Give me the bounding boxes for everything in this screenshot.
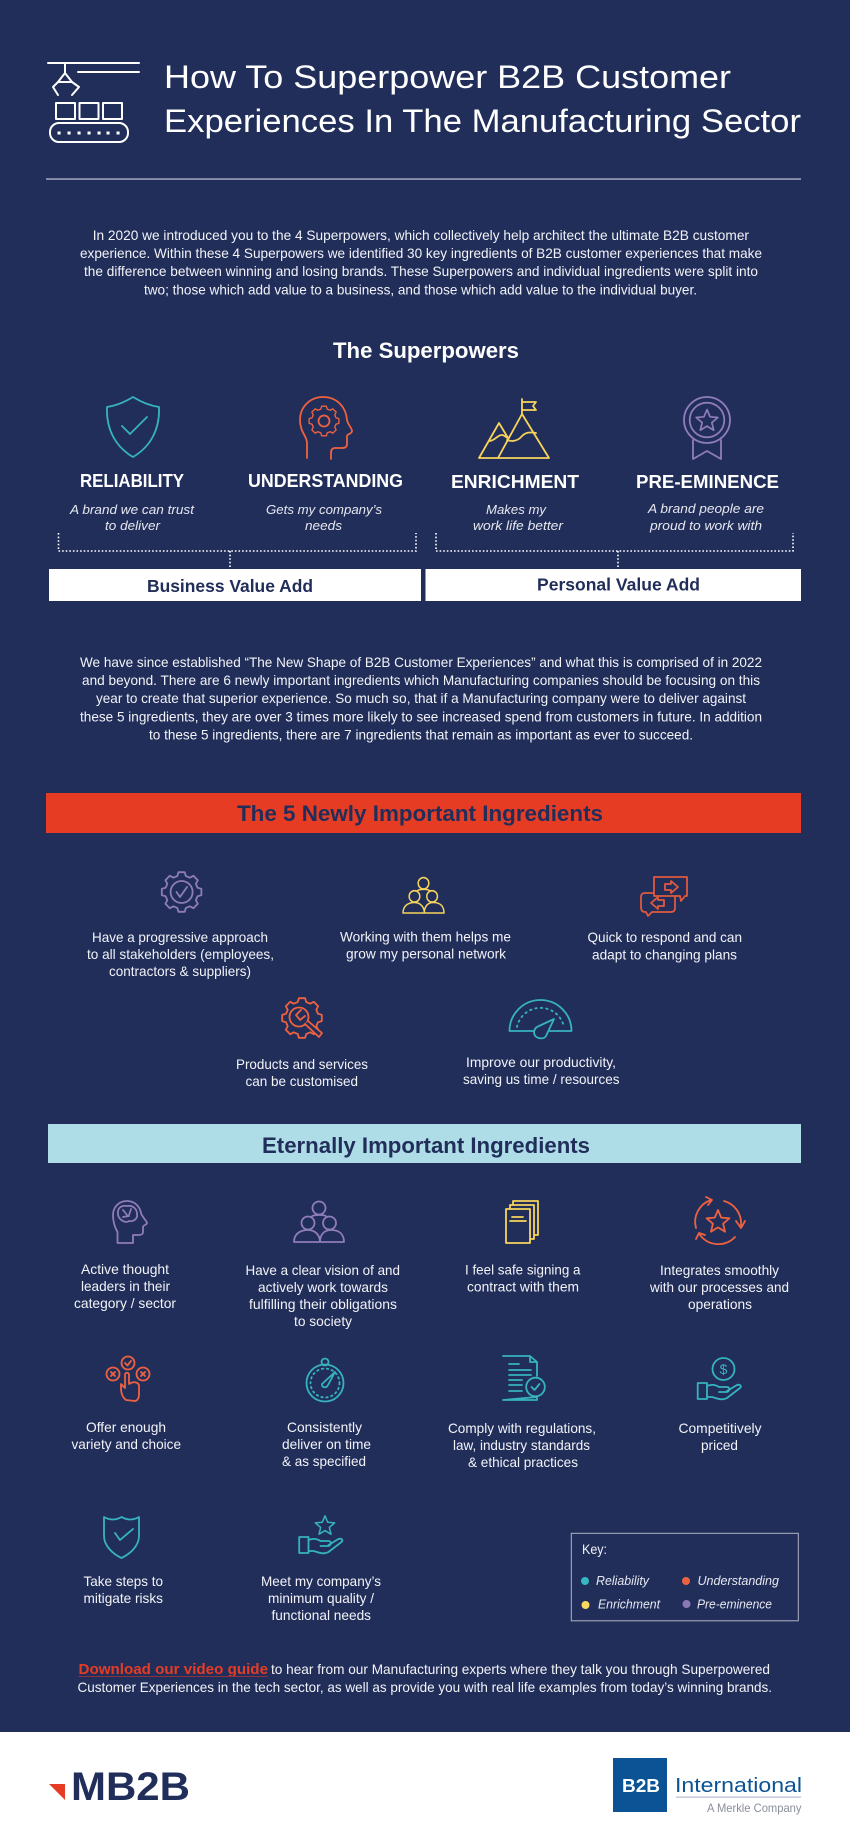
icon: speech bubbles with arrows [641,877,687,916]
superpower: enrichment: Makes my [486,502,548,517]
ingredient: thought leaders: Active thought [81,1261,169,1277]
ingredient: integrates smoothly: operations [688,1296,752,1312]
icon: group of people [403,878,444,913]
ingredient: comply with regulations [448,1356,596,1470]
logo: B2B International: B2B [622,1776,660,1796]
icon: star with cycle arrows [695,1197,745,1244]
ingredient: quick to respond: adapt to changing plans [592,946,737,962]
superpower: pre-eminence: A brand people are [647,501,764,516]
intro paragraph [80,227,762,298]
ingredient: mitigate risks [84,1517,163,1606]
ingredient: variety and choice: Offer enough [86,1419,166,1435]
ingredient: productivity: Improve our productivity, [466,1054,616,1070]
dotted bracket: personal [436,533,793,567]
superpower: pre-eminence: proud to work with [649,518,762,533]
ingredient: personal network [340,878,511,962]
title [164,59,801,139]
ingredient: clear vision: actively work towards [258,1279,388,1295]
superpower: pre-eminence [636,397,779,533]
ingredient: thought leaders: category / sector [74,1295,176,1311]
superpower: reliability: to deliver [105,518,161,533]
superpower: reliability: RELIABILITY [80,471,184,491]
ingredient: deliver on time: deliver on time [282,1436,371,1452]
banner: the 5 newly important ingredients: The 5 Newly Important Ingredients [237,801,603,826]
ingredient: safe contract: contract with them [467,1278,579,1294]
call to action: download video guide: Customer Experiences in the tech sector, as well as provide you with real life examples from today’s winning brands. [78,1679,772,1695]
ingredient: variety and choice [72,1356,181,1452]
box: personal value add: Personal Value Add [537,574,700,594]
legend: key: Key: [582,1541,607,1557]
title: Experiences In The Manufacturing Sector [164,103,801,139]
ingredient: personal network: Working with them helps me [340,928,511,944]
icon: gear with check [162,872,201,912]
second paragraph: to these 5 ingredients, there are 7 ingredients that remain as important as ever to succeed. [149,726,693,742]
ingredient: quick to respond [588,877,742,962]
ingredient: progressive approach: to all stakeholders (employees, [87,946,274,962]
superpower: enrichment: ENRICHMENT [451,472,579,492]
box: personal value add [426,569,801,601]
call to action: download video guide: Download our video guide [78,1662,268,1678]
dotted bracket: business [58,533,416,567]
second paragraph: year to create that superior experience. So much so, that if a Manufacturing company were to deliver against [96,690,746,706]
ingredient: quality needs [261,1516,381,1623]
ingredient: deliver on time: & as specified [282,1453,366,1469]
ingredient: quality needs: minimum quality / [268,1590,374,1606]
superpower: understanding [248,397,403,533]
logo: B2B International [613,1758,802,1815]
superpower: pre-eminence: PRE-EMINENCE [636,472,779,492]
ingredient: integrates smoothly: Integrates smoothly [660,1262,779,1278]
ingredient: deliver on time [282,1358,371,1469]
superpower: reliability: A brand we can trust [69,502,195,517]
superpower: enrichment: work life better [473,518,564,533]
intro paragraph: two; those which add value to a business, and those which add value to the individual buyer. [144,282,697,298]
ingredient: progressive approach: contractors & suppliers) [109,963,251,979]
ingredient: variety and choice: variety and choice [72,1436,181,1452]
ingredient: quality needs: Meet my company’s [261,1573,381,1589]
ingredient: personal network: grow my personal network [346,946,507,962]
superpower: enrichment [451,399,579,533]
banner: eternally important ingredients [48,1124,801,1163]
superpower: understanding: Gets my company’s [266,502,382,517]
icon: stacked documents [506,1201,538,1243]
ingredient: comply with regulations: Comply with regulations, [448,1420,596,1436]
ingredient: competitively priced: Competitively [678,1420,762,1436]
superpower: understanding: needs [305,518,343,533]
call to action: download video guide [78,1661,772,1695]
ingredient: competitively priced [678,1358,762,1453]
legend: key: Enrichment [598,1596,661,1612]
icon: stopwatch [306,1358,344,1402]
ingredient: customised products: can be customised [246,1073,358,1089]
ingredient: mitigate risks: Take steps to [84,1573,163,1589]
ingredient: clear vision: Have a clear vision of and [246,1262,400,1278]
ingredient: comply with regulations: & ethical practices [468,1454,578,1470]
superpower: understanding: UNDERSTANDING [248,471,403,491]
legend: key: Pre-eminence [697,1596,772,1612]
banner: eternally important ingredients: Eternally Important Ingredients [262,1133,590,1158]
ingredient: productivity [463,1000,620,1087]
title: How To Superpower B2B Customer [164,59,731,95]
panel: eternally important ingredients [72,1197,789,1623]
ingredient: customised products [236,998,368,1089]
ingredient: safe contract: I feel safe signing a [465,1262,581,1278]
icon: factory conveyor [48,63,139,142]
logo: B2B International: A Merkle Company [707,1801,802,1815]
icon: head with gear [300,397,352,459]
icon: gauge [510,1000,572,1038]
second paragraph: and beyond. There are 6 newly important ingredients which Manufacturing companies should be focusing on this [82,672,760,688]
legend: key: Reliability [596,1573,650,1588]
icon: hand with dollar coin: $ [720,1361,728,1377]
intro paragraph: the difference between winning and losing brands. These Superpowers and individual ingredients were split into [84,263,758,279]
ingredient: integrates smoothly [649,1197,789,1312]
ingredient: progressive approach: Have a progressive approach [92,929,268,945]
ingredient: clear vision [246,1202,400,1329]
ingredient: mitigate risks: mitigate risks [84,1590,163,1606]
heading: the superpowers: The Superpowers [333,338,519,363]
footer [0,1732,850,1836]
second paragraph: these 5 ingredients, they are over 3 times more likely to see increased spend from customers in future. In addition [80,708,762,724]
ingredient: integrates smoothly: with our processes and [649,1279,789,1295]
ingredient: deliver on time: Consistently [287,1419,362,1435]
ingredient: thought leaders [74,1201,176,1311]
banner: the 5 newly important ingredients [46,793,801,833]
intro paragraph: In 2020 we introduced you to the 4 Superpowers, which collectively help architect the ultimate B2B customer [93,227,749,243]
ingredient: thought leaders: leaders in their [81,1278,170,1294]
icon: medal with star [684,397,730,459]
logo: B2B International: International [675,1775,802,1797]
ingredient: quick to respond: Quick to respond and can [588,929,742,945]
panel: the superpowers [49,338,801,601]
icon: hand with star [299,1516,342,1553]
ingredient: quality needs: functional needs [272,1607,371,1623]
ingredient: competitively priced: priced [701,1437,738,1453]
ingredient: safe contract [465,1201,581,1294]
ingredient: clear vision: to society [294,1313,352,1329]
box: business value add: Business Value Add [147,576,313,596]
header [48,59,801,142]
second paragraph [80,654,762,742]
icon: group of people [294,1202,344,1242]
ingredient: progressive approach [87,872,274,979]
icon: mountain with flag [479,399,549,458]
icon: gear with wrench [282,998,322,1038]
intro paragraph: experience. Within these 4 Superpowers we identified 30 key ingredients of B2B customer experiences that make [80,245,762,261]
ingredient: customised products: Products and services [236,1056,368,1072]
logo: MB2B: MB2B [71,1765,190,1809]
ingredient: clear vision: fulfilling their obligations [249,1296,397,1312]
superpower: reliability [69,397,195,533]
ingredient: comply with regulations: law, industry standards [453,1437,590,1453]
panel: newly important ingredients [87,872,742,1089]
icon: document with check [503,1356,545,1400]
ingredient: productivity: saving us time / resources [463,1071,620,1087]
legend: key: Understanding [698,1573,780,1588]
legend: key [571,1533,798,1621]
box: business value add [49,569,421,601]
call to action: download video guide: to hear from our Manufacturing experts where they talk you through Superpowered [271,1661,770,1677]
icon: hand with choices [106,1356,150,1401]
second paragraph: We have since established “The New Shape of B2B Customer Experiences” and what this is comprised of in 2022 [80,654,762,670]
icon: shield with check [104,1517,139,1558]
icon: head with brain [113,1201,147,1243]
icon: shield with check [107,397,159,457]
